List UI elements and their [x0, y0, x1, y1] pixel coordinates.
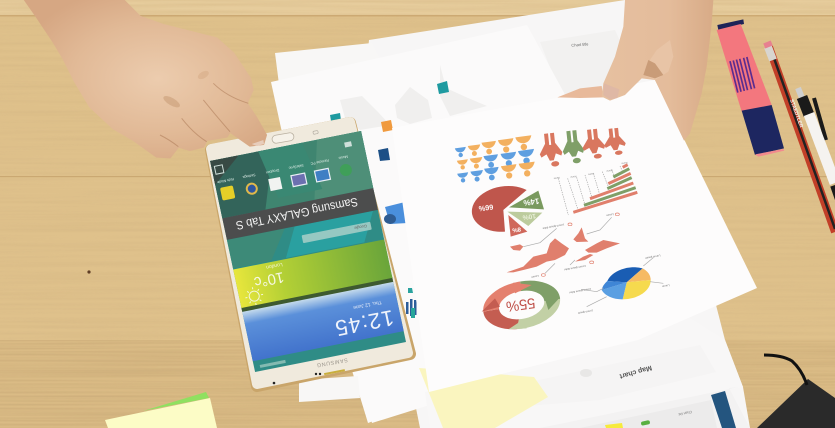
location: London [265, 261, 283, 270]
lower sheet beneath tablet [358, 355, 436, 423]
black notebook [757, 379, 835, 428]
app labels: Kids Mode [217, 177, 234, 184]
printed charts [455, 127, 670, 330]
search bar: Google [353, 223, 367, 231]
gold bar [324, 369, 345, 375]
blue map patch [385, 202, 408, 224]
pie chart: percentages: 14% [523, 196, 540, 207]
clock: 12:45 [332, 305, 396, 341]
temperature: 10°c [252, 268, 286, 291]
inner page with chart caption [540, 30, 640, 98]
world map chart: Lorem [605, 212, 614, 218]
small lower sheet [299, 376, 360, 402]
map chart sheet: Map chart [618, 364, 652, 380]
app labels: Settings [242, 173, 256, 179]
coloured pie chart: Lorem [661, 283, 670, 289]
pin: teal by tablet [408, 288, 413, 293]
status bar [260, 360, 286, 368]
highlighter [717, 19, 784, 157]
weather photo: grass [233, 239, 392, 308]
app icon: colour ball [339, 163, 353, 177]
forefinger [557, 86, 603, 98]
samsung banner [222, 188, 378, 240]
app icon: settings gear [246, 183, 258, 195]
app labels: SideSync [288, 163, 304, 170]
tablet screen [210, 131, 406, 372]
weather photo: treeline [241, 277, 393, 312]
app labels: Dropbox [265, 168, 280, 175]
world map chart: Lorem [530, 274, 539, 279]
app labels: Remote PC [310, 158, 329, 166]
world map chart [507, 212, 620, 279]
status icon [344, 141, 352, 148]
world map chart: Lorem ipsum dolor [564, 264, 586, 272]
wallpaper facets [210, 131, 373, 218]
app icon: dropbox [268, 177, 282, 191]
pin: orange low [412, 378, 423, 388]
pencil: STAEDTLER [788, 99, 804, 129]
back sheet of paper, top [360, 0, 750, 428]
pencil [767, 42, 835, 232]
horizontal bar chart: Name [620, 161, 628, 164]
pie chart: percentages: 10% [522, 212, 536, 221]
apps grid button [214, 165, 224, 174]
sticky note bottom left [105, 392, 217, 428]
tablet sensors [273, 373, 321, 384]
date: Thu, 12 June [352, 299, 382, 310]
main printed sheet [392, 80, 757, 392]
pin: blue [378, 148, 390, 161]
right hand [557, 0, 713, 141]
sun icon [244, 286, 265, 307]
barcode [730, 57, 755, 93]
app icon: blue card [314, 168, 330, 182]
dark blob [384, 214, 396, 224]
back of hand and thumb [602, 0, 713, 141]
green toggle [641, 420, 650, 426]
coloured pie chart [569, 254, 670, 315]
app icon: yellow kids [220, 185, 235, 201]
cycle chart 55% [482, 280, 560, 330]
yellow tile [605, 423, 623, 428]
yellow sticky note under paper [419, 368, 548, 428]
coloured pie chart: Lorem ipsum [644, 254, 661, 260]
pie chart: percentages: 66% [478, 202, 494, 213]
dashboard panel [580, 400, 717, 428]
fingernail [252, 140, 264, 146]
samsung banner: Samsung GALAXY Tab S [235, 195, 359, 233]
tablet body [211, 123, 410, 386]
pin: teal small [330, 113, 341, 121]
pin: orange [381, 120, 393, 132]
pin: teal [437, 81, 449, 94]
cycle chart 55%: 55% [505, 294, 536, 314]
map chart sheet [425, 318, 743, 428]
inner page with chart caption: Chart title [571, 41, 589, 48]
coloured pie chart: Lorem ipsum [577, 309, 593, 315]
samsung wordmark: SAMSUNG [316, 356, 348, 368]
thumbnail [603, 83, 619, 99]
grey world map [340, 65, 487, 130]
pie chart: percentages: 8% [511, 225, 521, 233]
home button [271, 132, 295, 144]
map sheet with pins [271, 25, 568, 423]
world map chart: Lorem ipsum dolor [542, 223, 565, 231]
mechanical pen [798, 88, 835, 205]
tablet [210, 122, 410, 386]
pie chart: percentages [472, 186, 544, 237]
knuckle shadow [162, 94, 182, 110]
app labels: Music [338, 154, 348, 160]
crease between thumb and finger [643, 40, 673, 80]
horizontal bar chart: Name [587, 172, 594, 175]
pictogram grid [455, 135, 535, 183]
navy stripe [711, 391, 736, 428]
horizontal bar chart: Name [605, 169, 613, 172]
finger creases [160, 83, 248, 147]
weather photo: sky [242, 280, 404, 361]
horizontal bar chart: Name [569, 175, 577, 178]
earpiece detail [313, 130, 318, 134]
large person icons [538, 127, 627, 168]
coloured pie chart: Lorem ipsum dolor [569, 287, 591, 295]
back sheet of paper, left [275, 43, 400, 100]
notebook ribbon [764, 355, 807, 385]
faint logo [580, 369, 592, 377]
horizontal bar chart: Name [553, 176, 560, 179]
left hand [25, 0, 266, 157]
app labels [217, 154, 348, 184]
search bar [302, 222, 372, 243]
app icon: note [291, 173, 307, 187]
dashboard text: Chart list [678, 410, 692, 416]
bottom dashboard sheet [540, 387, 750, 428]
horizontal bar chart [553, 161, 637, 215]
bar cluster [406, 299, 420, 318]
